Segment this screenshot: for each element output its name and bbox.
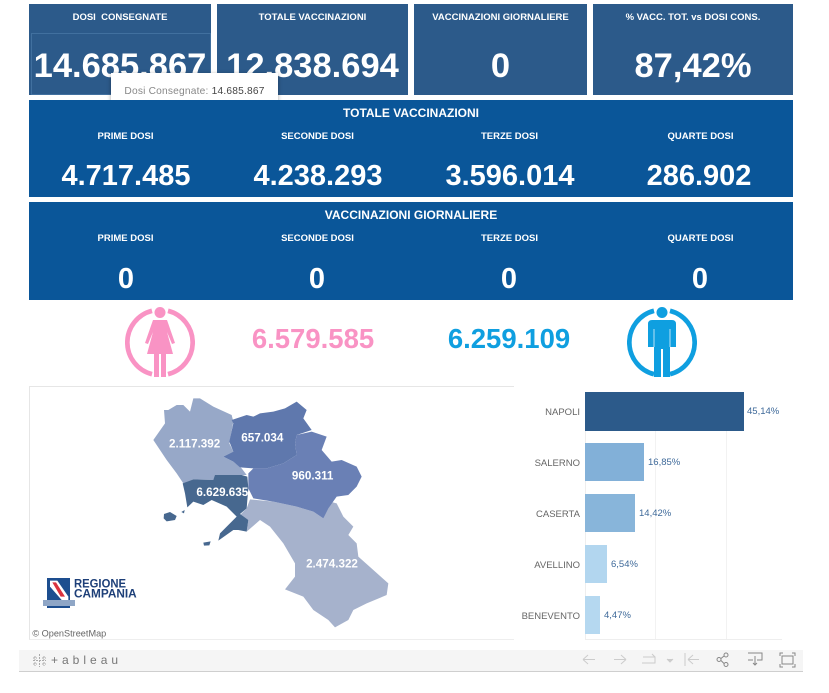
toolbar icons — [582, 652, 796, 668]
panel: vaccinazioni giornaliere per dose — [29, 202, 793, 300]
value: percentuale: 87,42% — [634, 47, 752, 85]
percent: salerno: 16,85% — [648, 457, 680, 468]
icon: woman — [125, 307, 195, 377]
label: avellino: AVELLINO — [534, 560, 580, 571]
heading: totale vaccinazioni: TOTALE VACCINAZIONI — [259, 12, 366, 23]
tooltip: Dosi Consegnate: 14.685.867 — [124, 86, 265, 97]
province: napoli — [164, 475, 249, 546]
province: napoli: 6.629.635 — [196, 486, 249, 499]
tooltip — [111, 73, 278, 107]
province: salerno — [240, 499, 388, 627]
value: prime dosi giornaliere: 0 — [118, 263, 134, 295]
bar: benevento — [585, 596, 600, 634]
panel: percentuale vaccinazioni su dosi — [593, 4, 793, 95]
label: seconde dosi: SECONDE DOSI — [281, 131, 354, 142]
heading: percentuale: % VACC. TOT. vs DOSI CONS. — [626, 12, 760, 23]
attribution: © OpenStreetMap — [32, 628, 106, 638]
bar: caserta — [585, 494, 635, 532]
label: prime dosi: PRIME DOSI — [98, 131, 153, 142]
value: quarte dosi giornaliere: 0 — [692, 263, 708, 295]
heading: vaccinazioni giornaliere: VACCINAZIONI GIORNALIERE — [432, 12, 569, 23]
percent: avellino: 6,54% — [611, 559, 638, 570]
value: quarte dosi: 286.902 — [647, 160, 751, 192]
value: terze dosi: 3.596.014 — [445, 160, 574, 192]
map frame — [29, 386, 514, 640]
label: seconde dosi giornaliere: SECONDE DOSI — [281, 233, 354, 244]
value: vaccinazioni giornaliere: 0 — [491, 47, 510, 85]
toolbar — [19, 650, 803, 672]
bar: napoli — [585, 392, 744, 431]
percent: napoli: 45,14% — [747, 406, 779, 417]
panel: dosi consegnate — [29, 4, 211, 95]
label: napoli: NAPOLI — [545, 407, 580, 418]
value: men vaccinated: 6.259.109 — [448, 323, 570, 354]
selected value box — [31, 33, 211, 95]
percent: benevento: 4,47% — [604, 610, 631, 621]
province: salerno: 2.474.322 — [306, 557, 358, 570]
panel: totale vaccinazioni per dose — [29, 100, 793, 197]
value: seconde dosi giornaliere: 0 — [309, 263, 325, 295]
label: prime dosi giornaliere: PRIME DOSI — [98, 233, 153, 244]
bar: salerno — [585, 443, 644, 481]
value: prime dosi: 4.717.485 — [61, 160, 190, 192]
panel: vaccinazioni giornaliere — [414, 4, 587, 95]
province: caserta: 2.117.392 — [169, 437, 221, 450]
heading: vaccinazioni giornaliere band: VACCINAZIONI GIORNALIERE — [325, 208, 497, 222]
bar chart: share by province — [585, 431, 782, 640]
label: quarte dosi giornaliere: QUARTE DOSI — [668, 233, 733, 244]
value: totale vaccinazioni: 12.838.694 — [226, 47, 399, 85]
icon: man — [627, 307, 697, 377]
logo: regione campania: REGIONE — [74, 576, 126, 590]
label: salerno: SALERNO — [535, 458, 580, 469]
logo: regione campania: CAMPANIA — [74, 587, 137, 601]
heading: dosi consegnate: DOSI CONSEGNATE — [73, 12, 167, 23]
label: terze dosi giornaliere: TERZE DOSI — [481, 233, 538, 244]
province: avellino: 960.311 — [292, 469, 334, 482]
map: campania provinces — [32, 398, 388, 638]
value: terze dosi giornaliere: 0 — [501, 263, 517, 295]
label: benevento: BENEVENTO — [522, 611, 580, 622]
value: dosi consegnate: 14.685.867 — [34, 47, 206, 85]
province: benevento — [223, 402, 312, 468]
label: quarte dosi: QUARTE DOSI — [668, 131, 733, 142]
label: caserta: CASERTA — [536, 509, 580, 520]
province: avellino — [248, 432, 362, 518]
province: benevento: 657.034 — [241, 432, 284, 445]
value: seconde dosi: 4.238.293 — [253, 160, 382, 192]
value: women vaccinated: 6.579.585 — [252, 323, 374, 354]
label: terze dosi: TERZE DOSI — [481, 131, 538, 142]
logo: regione campania — [43, 576, 137, 608]
percent: caserta: 14,42% — [639, 508, 671, 519]
wordmark: tableau: +ableau — [51, 653, 122, 667]
panel: totale vaccinazioni — [217, 4, 408, 95]
icon: tableau logo — [33, 654, 46, 667]
province: caserta — [153, 398, 247, 483]
heading: totale vaccinazioni band: TOTALE VACCINAZIONI — [343, 106, 479, 120]
bar: avellino — [585, 545, 607, 583]
